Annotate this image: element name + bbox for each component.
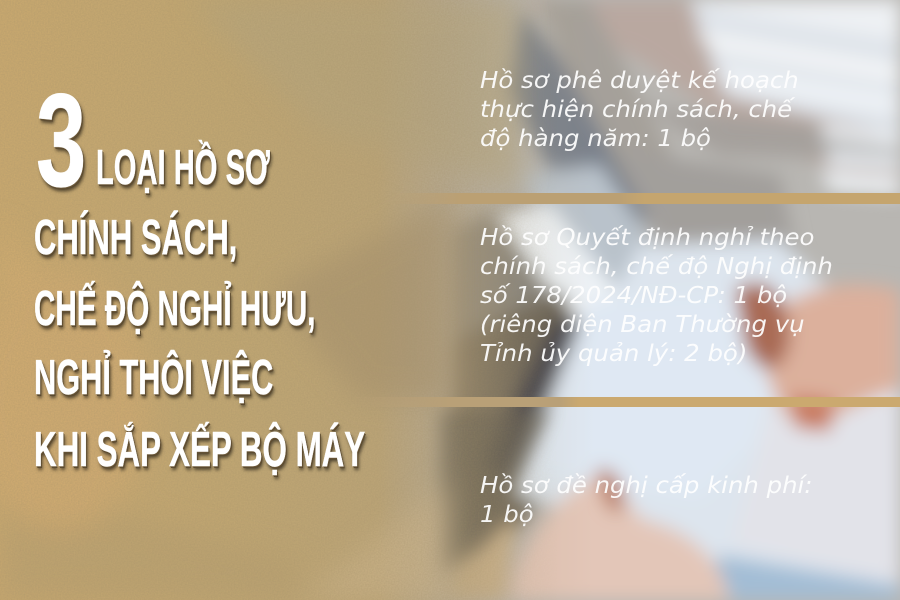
- text: retirement decision dossier: Tỉnh ủy quản lý: 2 bộ): [480, 341, 747, 367]
- text: retirement decision dossier: Hồ sơ Quyết định nghỉ theo: [480, 225, 814, 251]
- text: funding request dossier: Hồ sơ đề nghị cấp kinh phí:: [480, 473, 813, 499]
- gold divider: upper: [390, 193, 900, 204]
- title: line 3: CHẾ ĐỘ NGHỈ HƯU,: [34, 282, 316, 336]
- title: big number 3: 3: [36, 67, 86, 215]
- text: annual plan dossier: [480, 68, 799, 152]
- title block: [34, 67, 368, 481]
- text: retirement decision dossier: (riêng diện Ban Thường vụ: [480, 312, 805, 338]
- text: retirement decision dossier: số 178/2024/NĐ-CP: 1 bộ: [480, 283, 787, 309]
- text: annual plan dossier: thực hiện chính sách, chế: [480, 97, 792, 123]
- text: funding request dossier: [480, 473, 813, 528]
- text: retirement decision dossier: chính sách, chế độ Nghị định: [480, 254, 833, 280]
- text: annual plan dossier: Hồ sơ phê duyệt kế hoạch: [480, 68, 799, 94]
- text: retirement decision dossier: [480, 225, 833, 367]
- title: line 5: KHI SẮP XẾP BỘ MÁY: [34, 423, 365, 477]
- title: line 4: NGHỈ THÔI VIỆC: [34, 351, 273, 405]
- title: line 1: LOẠI HỒ SƠ: [96, 141, 270, 195]
- text: funding request dossier: 1 bộ: [480, 502, 534, 528]
- gold divider: lower: [350, 397, 900, 407]
- title: line 2: CHÍNH SÁCH,: [34, 211, 237, 265]
- text: annual plan dossier: độ hàng năm: 1 bộ: [480, 126, 711, 152]
